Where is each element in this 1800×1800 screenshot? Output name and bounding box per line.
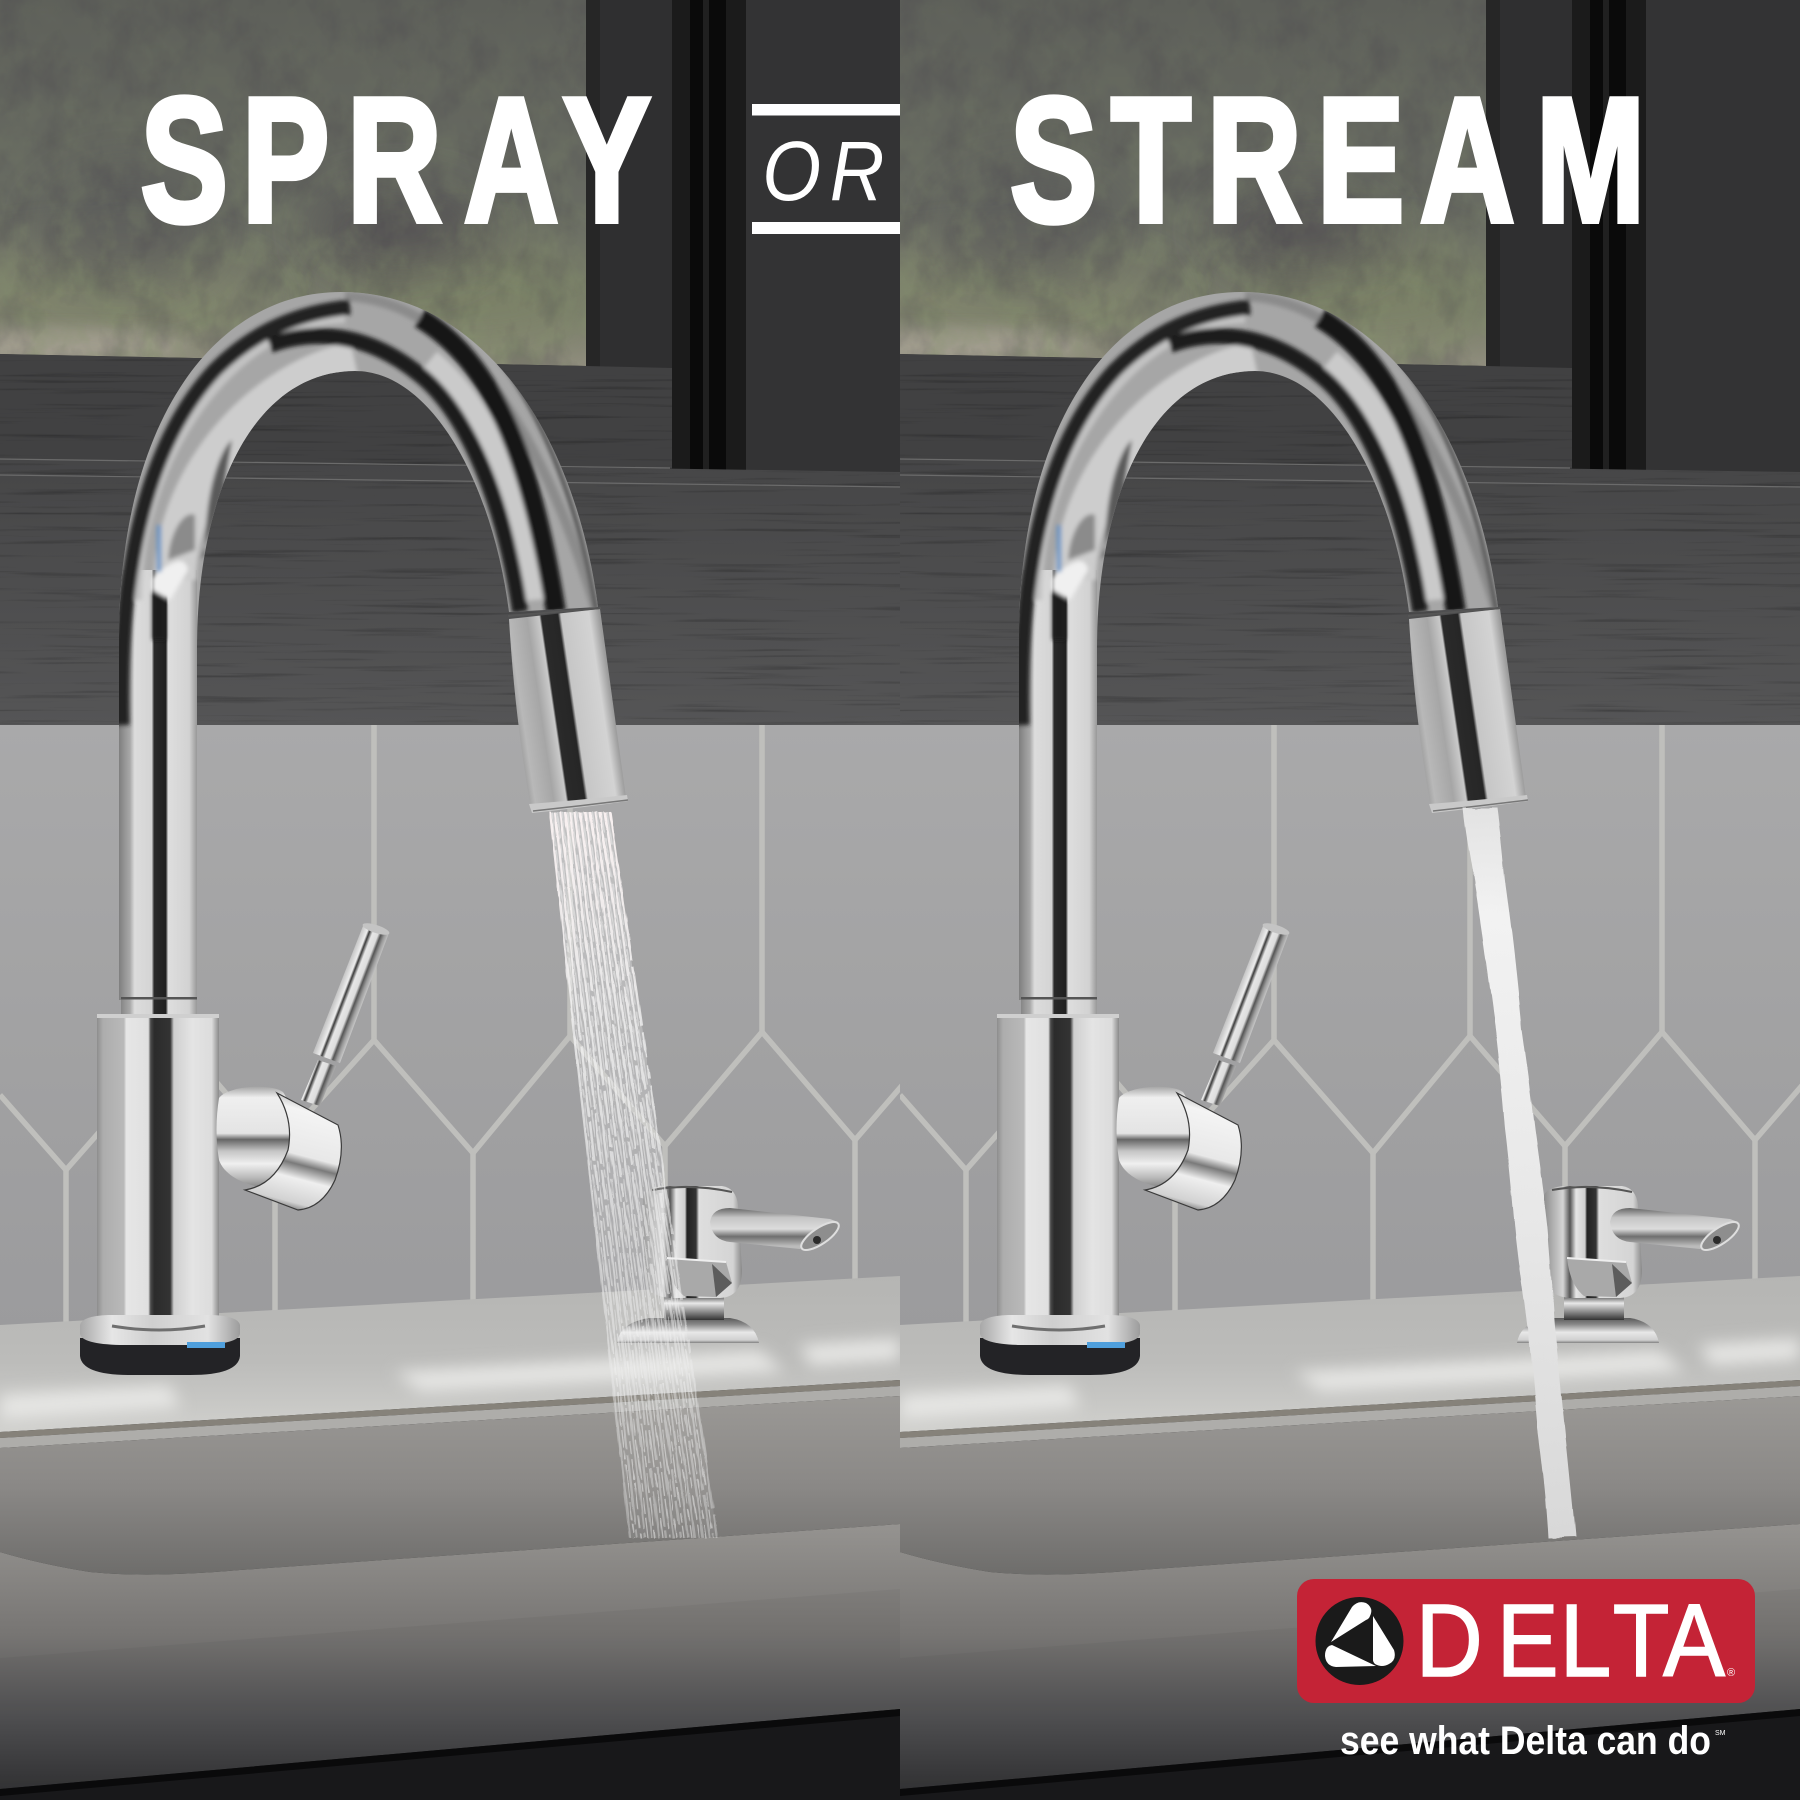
soap dispenser base plate	[617, 1318, 759, 1343]
sink basin	[0, 1396, 900, 1575]
logo emblem	[1316, 1597, 1404, 1685]
spray droplets	[552, 812, 713, 1538]
window sill	[0, 354, 672, 468]
countertop	[0, 1276, 900, 1432]
faucet handle hub	[216, 1087, 292, 1190]
soap dispenser	[617, 1186, 843, 1343]
cabinet	[0, 459, 900, 725]
faucet pull-down spray head	[508, 608, 628, 813]
title: SPRAY: SPRAY	[141, 61, 650, 259]
soap dispenser neck	[664, 1296, 724, 1320]
logo wordmark: DELTA	[1416, 1582, 1726, 1698]
window with blurred foliage	[0, 0, 600, 368]
faucet lever handle	[301, 921, 391, 1106]
faucet base body	[97, 1014, 219, 1324]
logo red badge	[1297, 1579, 1755, 1703]
faucet, right copy	[980, 292, 1528, 1375]
title divider: OR	[752, 104, 900, 234]
faucet	[80, 292, 628, 1375]
brand logo: Delta	[1297, 1579, 1755, 1763]
water: spray pattern	[550, 812, 717, 1538]
title: STREAM: STREAM	[1010, 61, 1645, 259]
counter light highlights	[0, 1338, 900, 1420]
dark base cabinet	[0, 1709, 900, 1800]
title divider: OR: OR	[762, 124, 884, 218]
window frame and dark molding	[586, 0, 900, 472]
counter front lip	[0, 1524, 900, 1800]
tile backsplash	[0, 725, 900, 1330]
panel: stream (right)	[830, 0, 1800, 1800]
soap dispenser scoop	[667, 1258, 732, 1297]
cabinet wood grain	[0, 356, 900, 726]
soap dispenser, right copy	[1517, 1186, 1743, 1343]
spray streaks	[550, 812, 717, 1538]
kitchen background: window, cabinet, tile, counter and sink	[0, 0, 950, 1800]
faucet handle cap	[245, 1093, 341, 1210]
panel: spray (left)	[0, 0, 950, 1800]
faucet collar	[121, 997, 197, 1015]
tile grout lines	[0, 725, 950, 1330]
kitchen background, right copy	[830, 0, 1800, 1800]
faucet spout arch	[119, 292, 598, 1000]
indicator light	[187, 1342, 225, 1348]
tagline: SM	[1715, 1730, 1726, 1737]
faucet touch base	[80, 1315, 240, 1375]
counter front edge	[0, 1380, 900, 1438]
soap dispenser spout	[710, 1208, 843, 1255]
spray haze	[550, 812, 717, 1538]
water: solid stream	[1463, 808, 1576, 1538]
tagline: see what Delta can do	[1340, 1719, 1711, 1763]
soap dispenser body	[643, 1186, 742, 1298]
registered mark: ®	[1727, 1667, 1735, 1679]
